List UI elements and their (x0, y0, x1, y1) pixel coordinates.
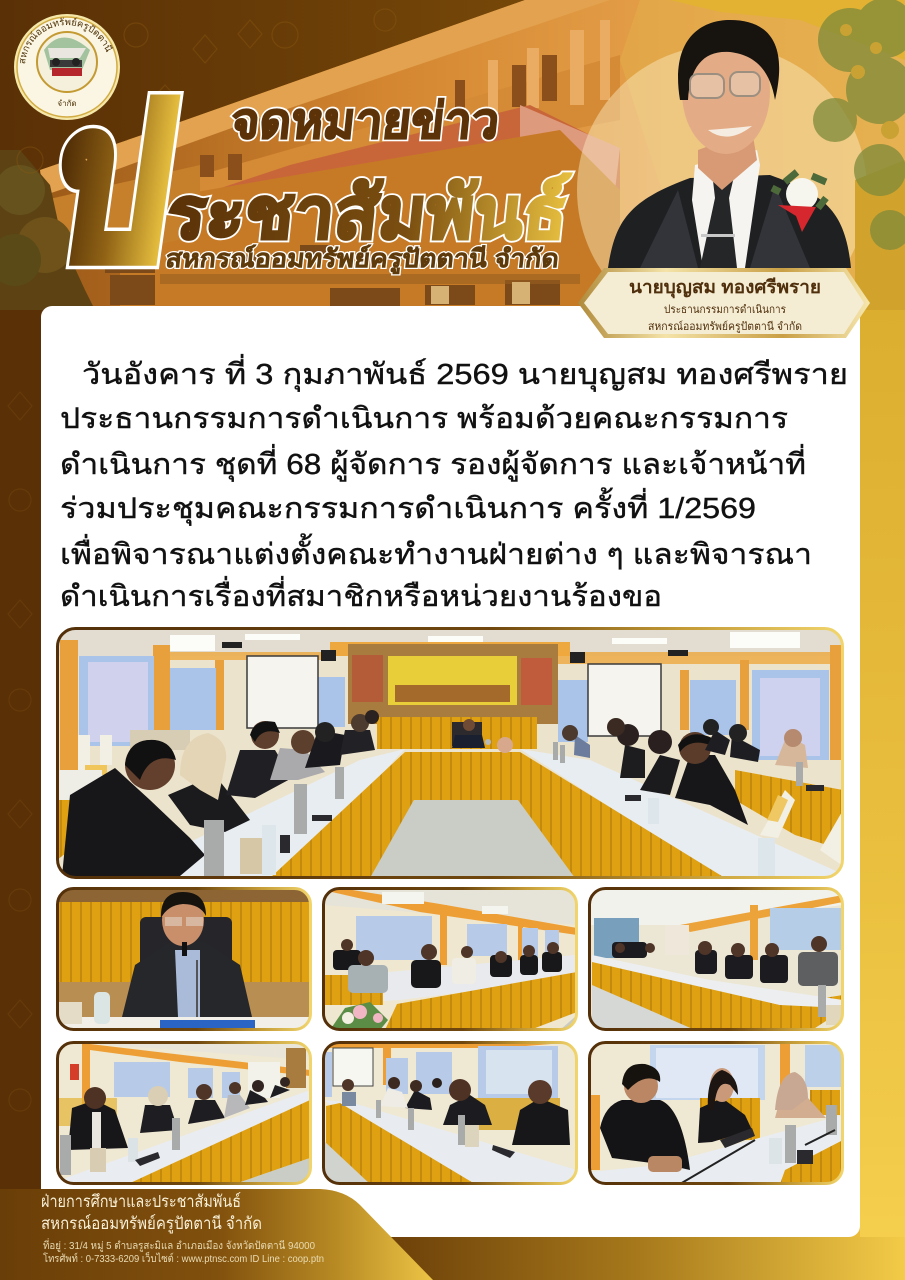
photo 6: participants (589, 1042, 843, 1184)
header background: building and trees (0, 0, 905, 335)
title line 1: จดหมายข่าว (228, 93, 502, 149)
chairman at head table (452, 722, 482, 746)
footer ribbon (0, 1189, 433, 1280)
body text: ประธานกรรมการดำเนินการ พร้อมด้วยคณะกรรมการ (60, 403, 788, 435)
body text: ร่วมประชุมคณะกรรมการดำเนินการ ครั้งที่ 1/2569 (60, 487, 756, 526)
logo text: สหกรณ์ออมทรัพย์ครูปัตตานี (20, 18, 114, 64)
suit (608, 175, 851, 268)
glasses (690, 72, 760, 98)
photo 4: participants (57, 1042, 311, 1184)
photo 2: participants (323, 888, 577, 1030)
photo 5: participants (323, 1042, 577, 1184)
position: ประธานกรรมการดำเนินการ (664, 304, 786, 316)
table items (204, 742, 803, 878)
side chairs (78, 730, 190, 770)
body text: ดำเนินการ ชุดที่ 68 ผู้จัดการ รองผู้จัดการ และเจ้าหน้าที่ (60, 444, 806, 482)
body text (60, 354, 848, 613)
floor (370, 798, 575, 878)
U shaped table (180, 749, 405, 876)
title line 2: ระชาสัมพันธ์ (163, 173, 572, 254)
left participants (62, 768, 205, 876)
subtitle: สหกรณ์ออมทรัพย์ครูปัตตานี จำกัด (164, 244, 560, 275)
right participants (675, 755, 748, 825)
contact: โทรศัพท์ : 0-7333-6209 เว็บไซต์ : www.ptnsc.com ID Line : coop.ptn (43, 1251, 324, 1265)
shirt (692, 150, 760, 268)
nameplate (578, 268, 870, 338)
side ornaments (8, 392, 32, 1111)
neck and head (698, 130, 757, 190)
big letter: ป (42, 66, 187, 301)
organisation: สหกรณ์ออมทรัพย์ครูปัตตานี จำกัด (648, 320, 802, 333)
name: นายบุญสม ทองศรีพราย (629, 277, 821, 299)
body text: ดำเนินการเรื่องที่สมาชิกหรือหน่วยงานร้องขอ (60, 576, 662, 613)
title block (42, 66, 572, 301)
corsage (772, 172, 826, 232)
title line 2: ระชาสัมพันธ์ (163, 173, 572, 254)
head table (377, 717, 537, 749)
title line 1: จดหมายข่าว (228, 93, 502, 149)
organisation name: สหกรณ์ออมทรัพย์ครูปัตตานี จำกัด (41, 1214, 262, 1234)
tie (700, 172, 737, 268)
white content card (41, 306, 860, 1237)
subtitle: สหกรณ์ออมทรัพย์ครูปัตตานี จำกัด (164, 244, 560, 275)
body text: เพื่อพิจารณาแต่งตั้งคณะทำงานฝ่ายต่าง ๆ และพิจารณา (60, 533, 812, 571)
portrait: chairman (608, 20, 851, 268)
logo (14, 14, 120, 120)
logo: จำกัด (57, 99, 77, 108)
main photo: meeting room (57, 628, 843, 878)
big letter: ป (42, 66, 187, 301)
photo 3: participants (589, 888, 843, 1030)
body text: วันอังคาร ที่ 3 กุมภาพันธ์ 2569 นายบุญสม ทองศรีพราย (82, 354, 848, 392)
address: ที่อยู่ : 31/4 หมู่ 5 ตำบลรูสะมิแล อำเภอเมือง จังหวัดปัตตานี 94000 (43, 1238, 315, 1252)
department name: ฝ่ายการศึกษาและประชาสัมพันธ์ (41, 1192, 241, 1211)
footer band right (380, 1237, 905, 1280)
photo 1: chairman speaking (57, 888, 311, 1030)
